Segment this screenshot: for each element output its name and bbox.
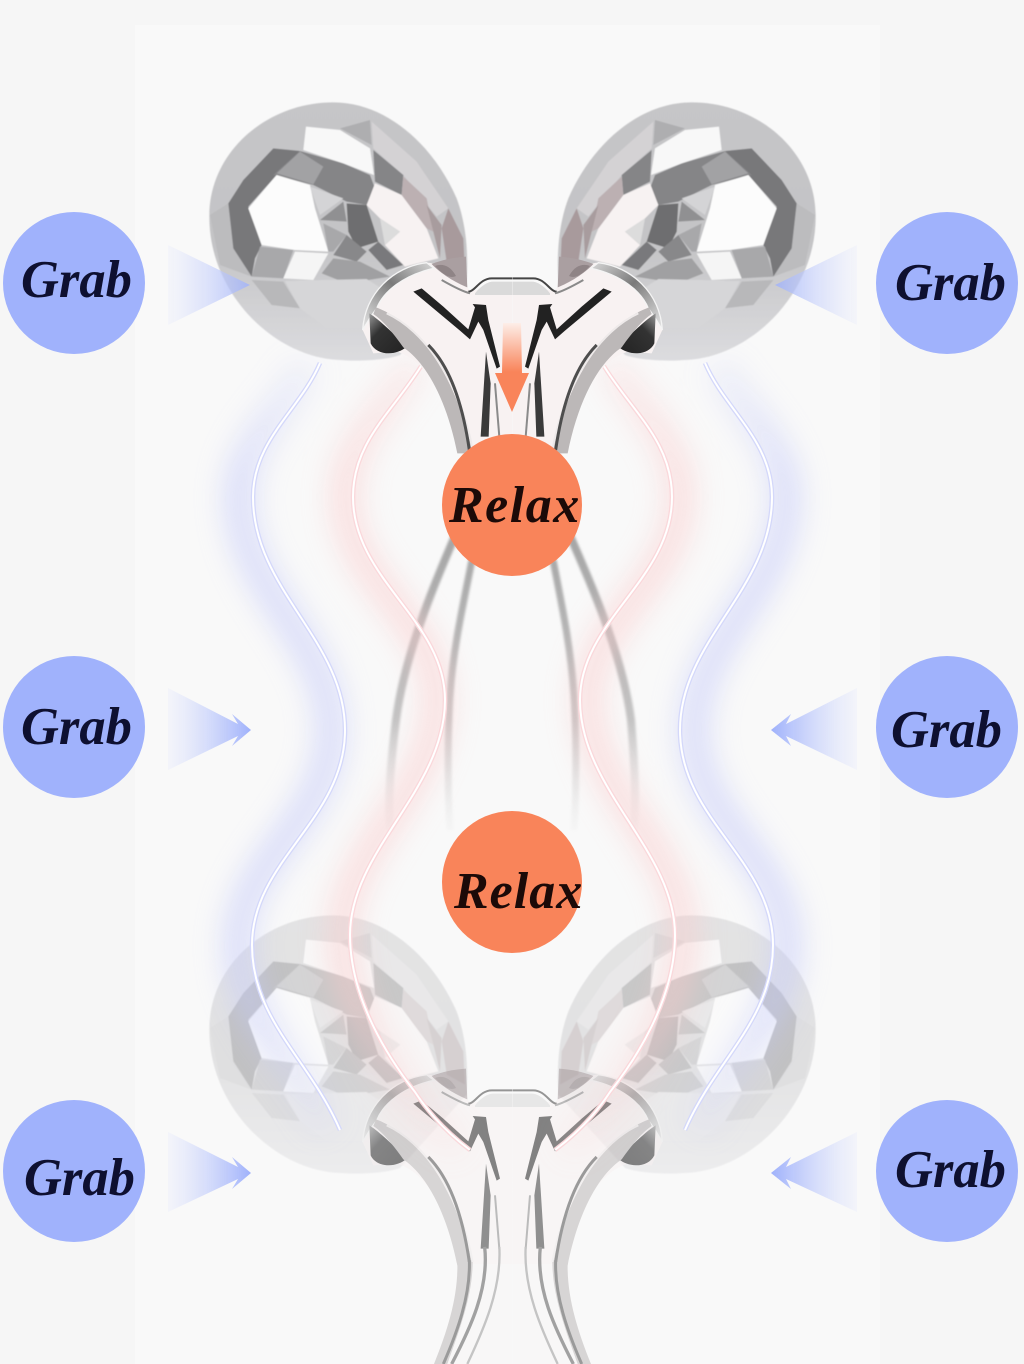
grab badge: middle right: Grab xyxy=(891,701,1002,759)
pink glow right xyxy=(563,363,683,1150)
blue line left xyxy=(252,363,345,1130)
blue glow right xyxy=(694,363,787,1130)
pink glow left xyxy=(342,363,462,1150)
grab badge: bottom left: Grab xyxy=(24,1149,135,1207)
relax badge: lower xyxy=(442,811,583,953)
arrow: bottom right xyxy=(771,1132,857,1212)
faded lower roller xyxy=(209,915,816,1364)
lower left roller ball xyxy=(209,915,467,1174)
grab badge: middle left: Grab xyxy=(21,698,132,756)
wave glows xyxy=(238,363,787,1150)
arrow: bottom left xyxy=(168,1132,251,1212)
grab badge: bottom right: Grab xyxy=(895,1141,1006,1199)
arrow: middle left xyxy=(168,688,251,770)
arrow: top right xyxy=(775,245,857,325)
pink line left xyxy=(350,363,470,1150)
upper roller handle xyxy=(363,257,662,453)
grab badge: top right xyxy=(876,212,1018,354)
upper roller xyxy=(209,102,816,453)
lower roller handle xyxy=(363,1069,662,1364)
upper left roller ball xyxy=(209,102,467,361)
arrow: top left xyxy=(168,245,250,325)
pink line right xyxy=(555,363,675,1150)
upper right roller ball xyxy=(558,102,816,361)
centre panel xyxy=(135,25,880,1364)
blue line right xyxy=(680,363,773,1130)
grab badge: top left: Grab xyxy=(21,251,132,309)
lower right roller ball xyxy=(558,915,816,1174)
blue glow left xyxy=(238,363,331,1130)
relax badge: upper xyxy=(442,434,582,576)
grab badge: middle right xyxy=(876,656,1018,798)
grab badge: bottom left xyxy=(3,1100,145,1242)
thin handle wires xyxy=(389,520,635,830)
wave lines xyxy=(252,363,773,1150)
arrow: middle right xyxy=(771,688,857,770)
relax badge: lower: Relax xyxy=(453,863,583,920)
orange down arrow xyxy=(495,323,529,412)
grab badge: bottom right xyxy=(876,1100,1018,1242)
grab badge: top right: Grab xyxy=(895,254,1006,312)
grab badge: top left xyxy=(3,212,145,354)
grab badge: middle left xyxy=(3,656,145,798)
relax badge: upper: Relax xyxy=(448,477,581,534)
